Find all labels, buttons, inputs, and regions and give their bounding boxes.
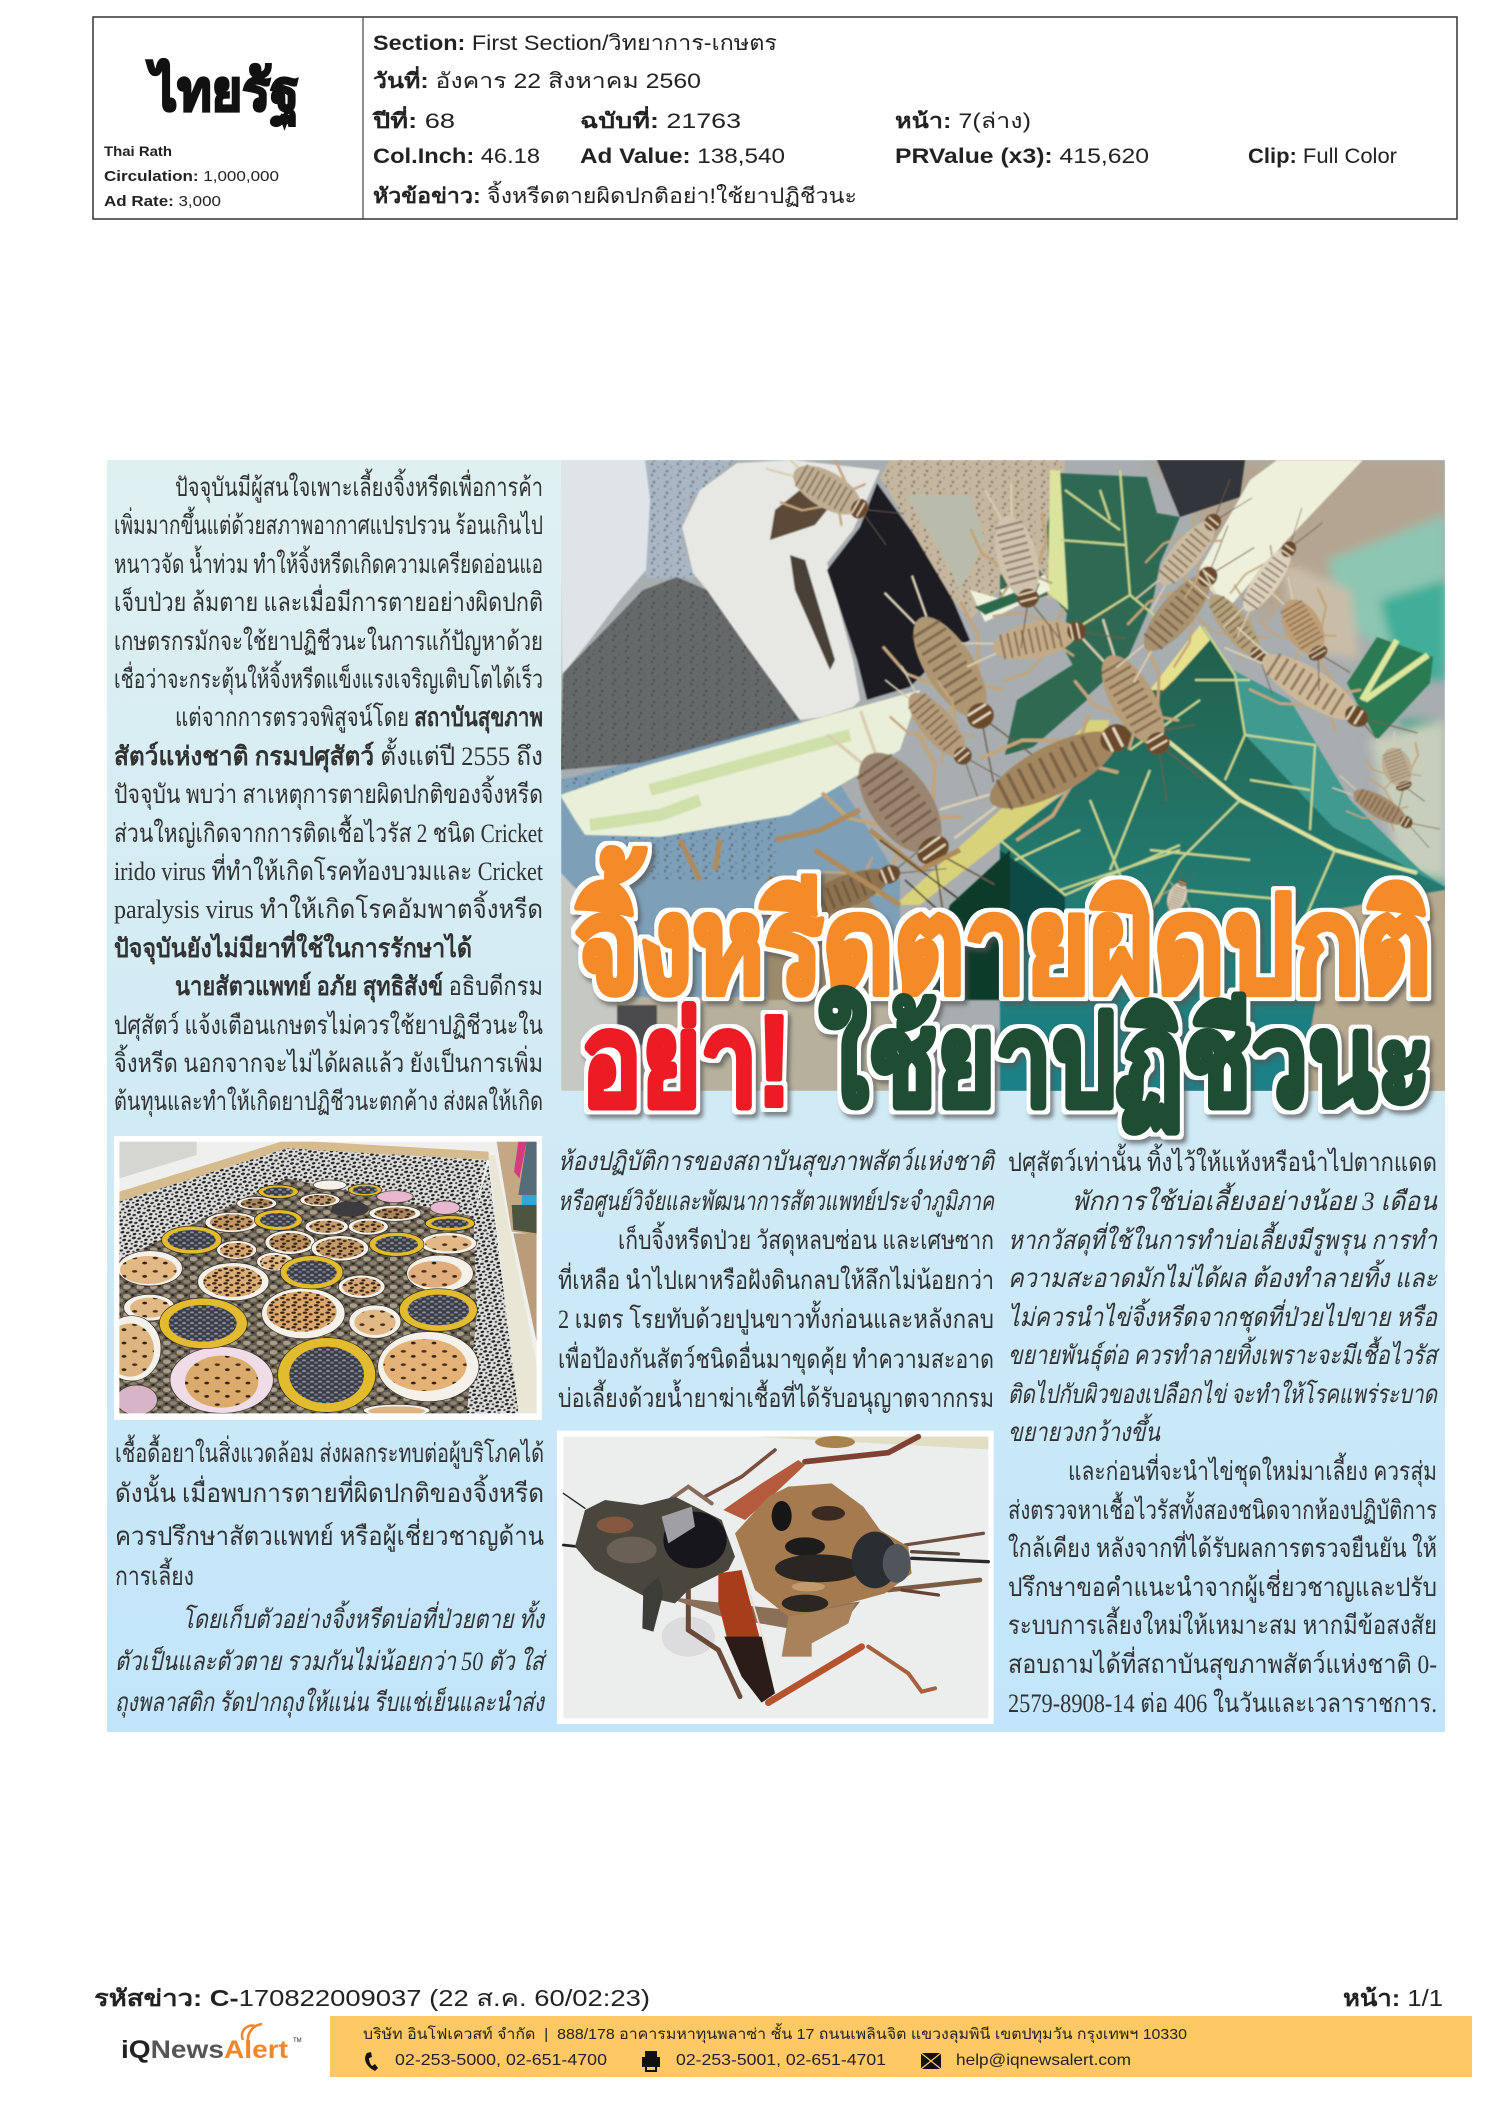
clipping info header table	[93, 17, 1457, 219]
article column 3: 2579-8908-14 ต่อ 406 ในวันและเวลาราชการ.	[1008, 1689, 1437, 1718]
article column 1: irido virus ที่ทำให้เกิดโรคท้องบวมและ Cricket	[114, 853, 544, 886]
clipping metadata rows: หัวข้อข่าว: จิ้งหรีดตายผิดปกติอย่า!ใช้ยาปฏิชีวนะ	[373, 181, 857, 208]
clipping metadata rows: วันที่: อังคาร 22 สิงหาคม 2560	[373, 65, 701, 93]
article column 3: สอบถามได้ที่สถาบันสุขภาพสัตว์แห่งชาติ 0-	[1008, 1646, 1437, 1680]
article column 1: ปัจจุบันยังไม่มียาที่ใช้ในการรักษาได้	[114, 929, 472, 965]
headline line 2: warning word: อย่า!	[581, 990, 791, 1133]
article column 1 lower: ตัวเป็นและตัวตาย รวมกันไม่น้อยกว่า 50 ตัว ใส่	[115, 1645, 547, 1676]
crickets on the main photo	[680, 430, 1444, 953]
photo: dead cricket	[557, 1431, 994, 1724]
article column 1: ต้นทุนและทำให้เกิดยาปฏิชีวนะตกค้าง ส่งผลให้เกิด	[114, 1087, 543, 1117]
clipping metadata rows: ปีที่: 68	[371, 105, 455, 133]
article column 1: ปัจจุบัน พบว่า สาเหตุการตายผิดปกติของจิ้งหรีด	[114, 775, 543, 810]
article column 1: ปศุสัตว์ แจ้งเตือนเกษตรไม่ควรใช้ยาปฏิชีวนะใน	[114, 1010, 543, 1041]
article column 1 lower: การเลี้ยง	[115, 1557, 194, 1591]
article column 2 top: เพื่อป้องกันสัตว์ชนิดอื่นมาขุดคุ้ย ทำความสะอาด	[558, 1341, 994, 1375]
iQNewsAlert logo	[121, 2024, 302, 2064]
clipping metadata rows: Col.Inch: 46.18	[373, 145, 540, 168]
article column 3: ปศุสัตว์เท่านั้น ทิ้งไว้ให้แห้งหรือนำไปตากแดด	[1008, 1143, 1437, 1178]
company contact band	[330, 2016, 1472, 2077]
article column 2 top: 2 เมตร โรยทับด้วยปูนขาวทั้งก่อนและหลังกลบ	[558, 1300, 994, 1335]
photo frame: cricket farm pen with feed plates	[114, 1136, 542, 1420]
publication stats: Ad Rate: 3,000	[104, 193, 221, 210]
article column 1 lower: ควรปรึกษาสัตวแพทย์ หรือผู้เชี่ยวชาญด้าน	[115, 1518, 544, 1552]
publication stats	[104, 143, 279, 210]
article column 1: paralysis virus ทำให้เกิดโรคอัมพาตจิ้งหรีด	[114, 890, 543, 924]
main photo: crickets on leaf	[560, 430, 1445, 1091]
article column 1 lower: โดยเก็บตัวอย่างจิ้งหรีดบ่อที่ป่วยตาย ทั้ง	[182, 1600, 546, 1634]
headline	[575, 847, 1431, 1133]
clipping metadata rows: Section: First Section/วิทยาการ-เกษตร	[373, 32, 777, 55]
article column 1: แต่จากการตรวจพิสูจน์โดย สถาบันสุขภาพ	[175, 702, 543, 734]
iQNewsAlert logo: iQNews Alert	[121, 2036, 289, 2064]
article column 3: ไม่ควรนำไข่จิ้งหรีดจากชุดที่ป่วยไปขาย หรือ	[1008, 1298, 1438, 1333]
article column 3	[1008, 1143, 1440, 1718]
article column 1 lower: เชื้อดื้อยาในสิ่งแวดล้อม ส่งผลกระทบต่อผู้บริโภคได้	[115, 1434, 544, 1469]
company address: บริษัท อินโฟเควสท์ จำกัด | 888/178 อาคารมหาทุนพลาซ่า ชั้น 17 ถนนเพลินจิต แขวงลุมพินี เขตปทุมวัน กรุงเทพฯ 10330	[363, 2023, 1187, 2044]
article column 2 top: บ่อเลี้ยงด้วยน้ำยาฆ่าเชื้อที่ได้รับอนุญาตจากกรม	[558, 1379, 994, 1414]
publication stats: Circulation: 1,000,000	[104, 168, 279, 185]
clipping metadata rows: Ad Value: 138,540	[580, 145, 785, 168]
article column 2 top: ที่เหลือ นำไปเผาหรือฝังดินกลบให้ลึกไม่น้อยกว่า	[558, 1262, 994, 1295]
article column 1: ปัจจุบันมีผู้สนใจเพาะเลี้ยงจิ้งหรีดเพื่อการค้า	[175, 468, 543, 503]
email: help@iqnewsalert.com	[956, 2052, 1131, 2069]
publication logo: Thai Rath: ไทยรัฐ	[146, 58, 299, 127]
clipping metadata rows: หน้า: 7(ล่าง)	[895, 109, 1031, 133]
article column 1: เจ็บป่วย ล้มตาย และเมื่อมีการตายอย่างผิดปกติ	[114, 584, 543, 617]
article panel background	[107, 460, 1445, 1732]
article column 1 lower	[115, 1434, 547, 1718]
news code line: รหัสข่าว: C- 170822009037 (22 ส.ค. 60/02:23)	[94, 1985, 650, 2011]
article column 2 top: เก็บจิ้งหรีดป่วย วัสดุหลบซ่อน และเศษซาก	[618, 1221, 994, 1256]
photo: cricket farm pen with feed plates	[102, 1140, 540, 1416]
page number: หน้า: 1/1	[1343, 1985, 1443, 2011]
article column 1: จิ้งหรีด นอกจากจะไม่ได้ผลแล้ว ยังเป็นการเพิ่ม	[114, 1044, 543, 1078]
article column 3: ระบบการเลี้ยงใหม่ให้เหมาะสม หากมีข้อสงสัย	[1008, 1606, 1437, 1640]
icon: phone	[365, 2052, 378, 2071]
iQNewsAlert logo: TM	[293, 2038, 302, 2044]
phone numbers: 02-253-5000, 02-651-4700	[395, 2052, 607, 2069]
clipping metadata rows: Clip: Full Color	[1248, 145, 1397, 168]
clipping metadata rows: PRValue (x3): 415,620	[895, 145, 1149, 168]
article column 1	[114, 468, 544, 1117]
icon: mail	[921, 2053, 941, 2069]
article column 2 top: หรือศูนย์วิจัยและพัฒนาการสัตวแพทย์ประจำภูมิภาค	[558, 1187, 995, 1217]
article column 1 lower: ดังนั้น เมื่อพบการตายที่ผิดปกติของจิ้งหรีด	[115, 1474, 544, 1508]
article column 2 top	[558, 1147, 996, 1414]
article column 3: ความสะอาดมักไม่ได้ผล ต้องทำลายทิ้ง และ	[1008, 1259, 1438, 1293]
article column 1: หนาวจัด น้ำท่วม ทำให้จิ้งหรีดเกิดความเครียดอ่อนแอ	[114, 545, 543, 579]
article column 2 top: ห้องปฏิบัติการของสถาบันสุขภาพสัตว์แห่งชาติ	[558, 1147, 996, 1177]
article column 1: เพิ่มมากขึ้นแต่ด้วยสภาพอากาศแปรปรวน ร้อนเกินไป	[114, 506, 543, 540]
article column 1 lower: ถุงพลาสติก รัดปากถุงให้แน่น รีบแช่เย็นและนำส่ง	[115, 1686, 546, 1718]
article column 1: เชื่อว่าจะกระตุ้นให้จิ้งหรีดแข็งแรงเจริญเติบโตได้เร็ว	[114, 660, 543, 695]
article column 1: ส่วนใหญ่เกิดจากการติดเชื้อไวรัส 2 ชนิด Cricket	[114, 814, 544, 848]
clipping metadata rows: ฉบับที่: 21763	[580, 105, 741, 133]
publication stats: Thai Rath	[104, 143, 172, 159]
article column 3: ขยายวงกว้างขึ้น	[1008, 1413, 1161, 1447]
clipping metadata rows	[371, 32, 1397, 208]
icon: fax	[642, 2051, 660, 2072]
article column 1: สัตว์แห่งชาติ กรมปศุสัตว์ ตั้งแต่ปี 2555 ถึง	[114, 737, 543, 773]
article column 3: หากวัสดุที่ใช้ในการทำบ่อเลี้ยงมีรูพรุน การทำ	[1008, 1221, 1438, 1256]
article column 1: นายสัตวแพทย์ อภัย สุทธิสังข์ อธิบดีกรม	[175, 971, 543, 1003]
article column 3: ปรึกษาขอคำแนะนำจากผู้เชี่ยวชาญและปรับ	[1008, 1569, 1437, 1603]
article column 1: เกษตรกรมักจะใช้ยาปฏิชีวนะในการแก้ปัญหาด้วย	[114, 627, 543, 656]
fax numbers: 02-253-5001, 02-651-4701	[676, 2052, 886, 2069]
article column 3: พักการใช้บ่อเลี้ยงอย่างน้อย 3 เดือน	[1072, 1182, 1438, 1216]
